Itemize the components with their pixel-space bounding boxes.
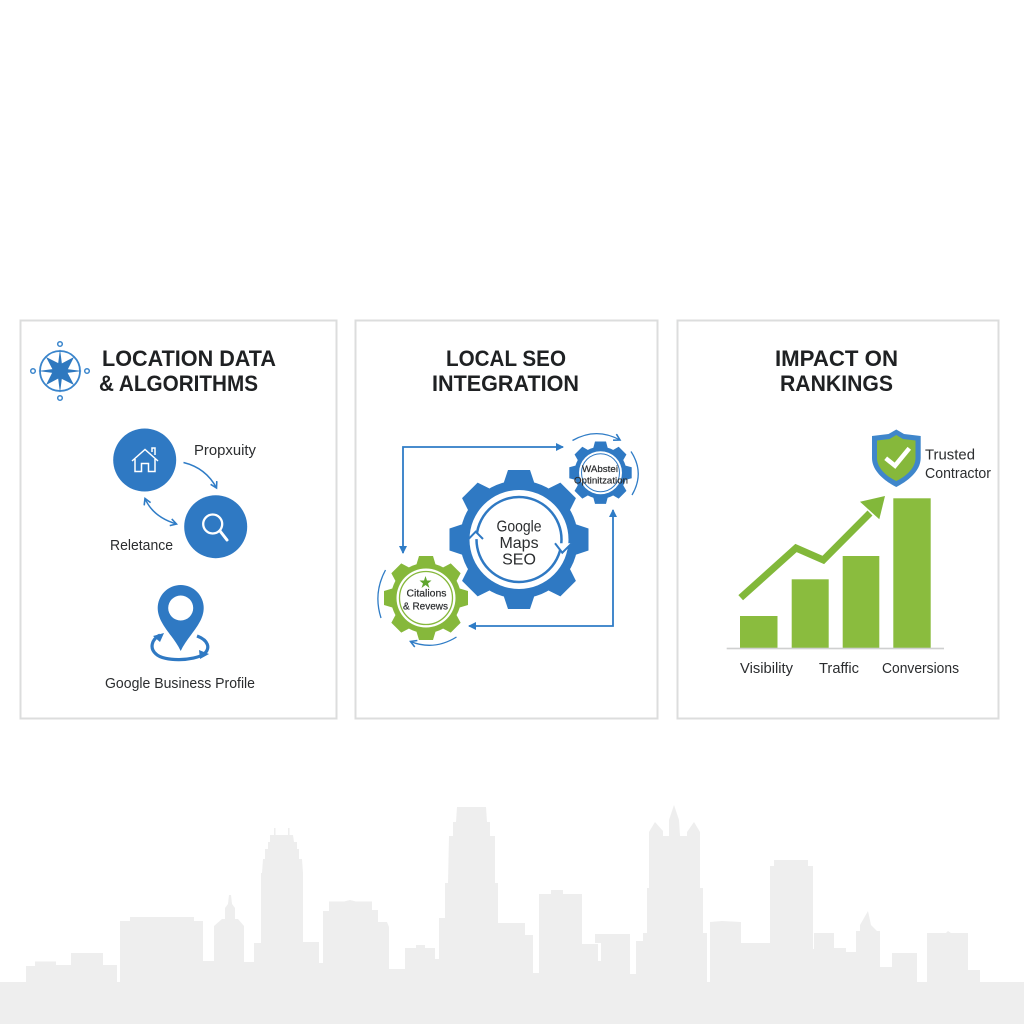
heading: INTEGRATION: [432, 371, 579, 396]
gear: google maps seo: [450, 470, 588, 609]
heading: & ALGORITHMS: [99, 371, 258, 396]
label: trusted contractor: [925, 448, 991, 482]
heading: RANKINGS: [780, 371, 893, 396]
axis labels: Conversions: [882, 661, 959, 677]
gear label: Google: [496, 518, 542, 536]
heading: [775, 346, 898, 396]
gear label: WAbstei: [582, 464, 618, 475]
heading: [432, 346, 579, 396]
growth arrow: [741, 496, 885, 598]
axis labels: [740, 661, 959, 677]
gear label: Optinitzation: [574, 476, 628, 486]
axis labels: Traffic: [819, 661, 859, 677]
axis labels: Visibility: [740, 661, 794, 677]
icon: trusted shield: [872, 430, 921, 487]
gear label: Maps: [499, 535, 539, 552]
label: google business profile: Google Business Profile: [105, 676, 255, 692]
panel: impact on rankings: [678, 320, 998, 718]
skyline background: [0, 805, 1024, 1024]
label: relevance: Reletance: [110, 538, 173, 554]
arrow: top arc: [572, 434, 620, 440]
gear label: [574, 464, 628, 486]
gear label: SEO: [502, 552, 536, 568]
gear: citations and reviews: [378, 556, 468, 645]
label: proximity: Propxuity: [194, 443, 257, 459]
gear label: & Revews: [403, 600, 448, 612]
gear: website optimization: [569, 434, 638, 504]
label: trusted contractor: Trusted: [925, 448, 975, 464]
panel: local seo integration: [356, 320, 658, 718]
gear label: [403, 588, 448, 612]
heading: [99, 346, 276, 396]
heading: LOCAL SEO: [446, 346, 566, 371]
label: trusted contractor: Contractor: [925, 466, 991, 482]
icon: search circle: [184, 495, 247, 558]
gear label: Citalions: [406, 588, 446, 600]
arrow: search to house: [145, 498, 176, 524]
gear label: [496, 518, 542, 568]
arrow: top loop connector: [403, 447, 563, 553]
icon: compass rose: [31, 342, 89, 400]
arrow: house to search: [184, 462, 216, 488]
arrow: right loop connector: [469, 510, 613, 626]
panel: location data and algorithms: [20, 320, 336, 718]
icon: house circle: [113, 428, 176, 492]
icon: map pin: [152, 585, 209, 660]
arrow: bottom arc: [410, 637, 456, 645]
heading: LOCATION DATA: [102, 346, 276, 371]
heading: IMPACT ON: [775, 346, 898, 371]
bar chart: [727, 496, 944, 649]
arrow: left arc: [378, 570, 386, 618]
arrow: right arc: [631, 452, 638, 495]
